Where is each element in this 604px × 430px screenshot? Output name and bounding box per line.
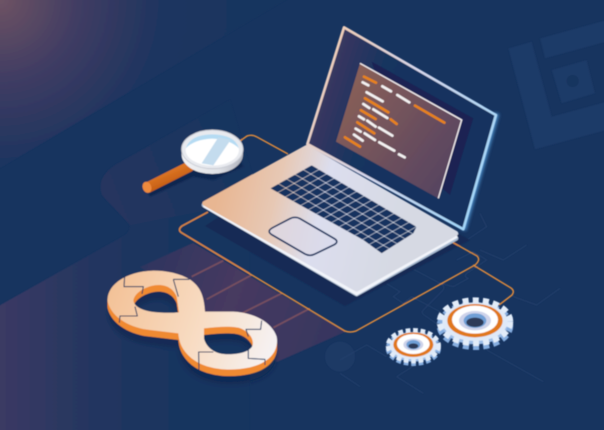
code panel (336, 63, 462, 198)
background band: behind magnifier (101, 100, 260, 225)
code panel shadow (372, 62, 473, 195)
small gear inner ring (403, 339, 423, 351)
small gear (388, 331, 438, 363)
laptop (204, 27, 497, 295)
code lines orange (345, 77, 444, 147)
small gear hub (406, 340, 420, 349)
magnifier handle end (141, 181, 153, 194)
magnifier rim front (182, 130, 243, 169)
magnifier reflection (186, 134, 239, 148)
magnifier rim side (182, 135, 243, 174)
magnifying glass (141, 130, 243, 197)
code lines white (354, 82, 409, 157)
background band: lower-left wave (0, 100, 250, 430)
large gear body side (442, 306, 508, 344)
magnifier shadow (147, 160, 243, 197)
large gear teeth (440, 301, 510, 342)
large gear shadow layer (440, 305, 510, 346)
infinity loop (108, 271, 277, 385)
small gear hole (408, 343, 418, 349)
orange outline panel (180, 135, 513, 332)
small gear orange ring (393, 332, 433, 357)
laptop shadow (205, 190, 470, 306)
infinity shadow (108, 286, 277, 385)
small gear white ring (397, 334, 430, 354)
large gear body (442, 302, 508, 341)
gears (388, 301, 510, 363)
keyboard (270, 165, 417, 253)
small gear shadow layer (388, 333, 438, 363)
laptop base front edge (204, 204, 457, 295)
stripes on pink region (192, 261, 310, 328)
infinity extrusion (108, 273, 277, 376)
laptop base side (204, 151, 456, 294)
laptop screen (307, 27, 496, 229)
large gear orange ring (447, 304, 503, 337)
laptop base top (205, 147, 456, 289)
background glow: top-left corner (0, 0, 294, 171)
laptop screen glow (463, 113, 497, 230)
small gear teeth (388, 331, 438, 361)
magnifier glass (186, 134, 239, 166)
large gear hub (464, 313, 486, 328)
small gear body side (390, 334, 437, 362)
large gear (440, 301, 510, 346)
background emblem: faint square (508, 20, 604, 149)
circuit lines (325, 213, 560, 393)
small gear body (390, 332, 437, 359)
magnifier handle (148, 167, 189, 187)
trackpad (269, 217, 337, 255)
large gear white ring (452, 306, 498, 334)
pink light region under laptop (140, 243, 345, 362)
magnifier stripes (202, 137, 231, 165)
infinity segment lines (119, 277, 265, 370)
large gear hole (466, 318, 484, 327)
infinity surface (108, 271, 277, 370)
large gear inner ring (459, 311, 491, 330)
code panel edge (360, 63, 462, 198)
